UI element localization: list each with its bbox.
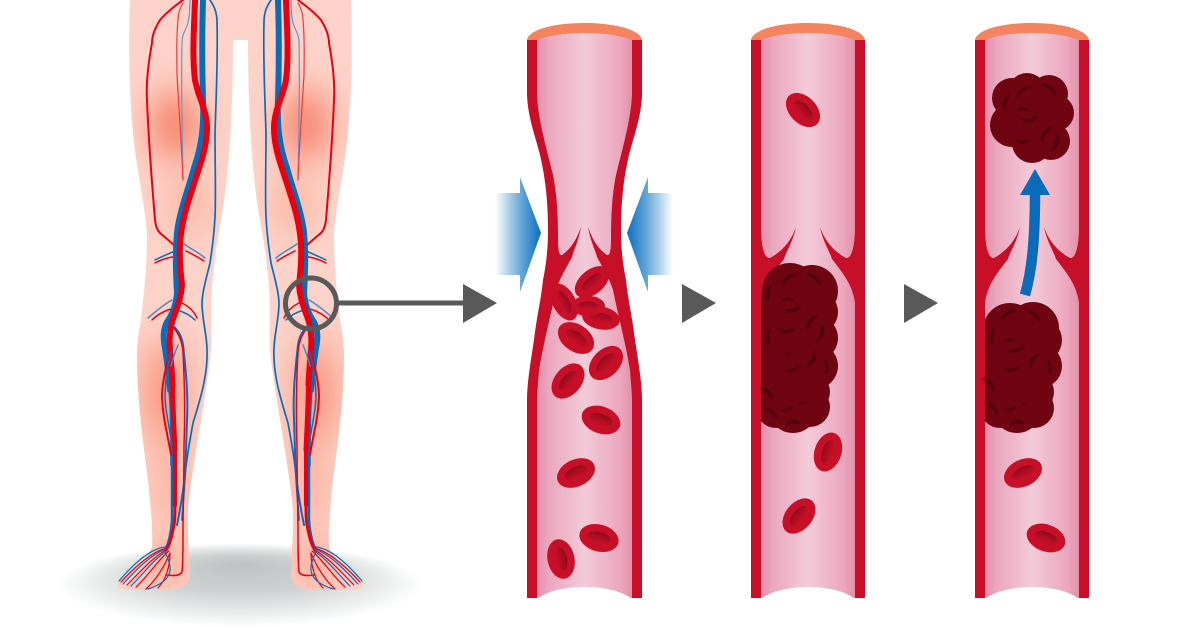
vessel 1: narrowed vein with clumping cells [527, 23, 642, 599]
vessel 2 bottom opening [761, 587, 855, 599]
vessel 1 blood cells [544, 260, 630, 581]
vessel 3 lumen [985, 33, 1079, 598]
vessel 3 upward blue arrow [1020, 169, 1050, 295]
vessel 3 red cells [999, 452, 1069, 558]
vessel 1 wall [527, 40, 642, 598]
vessel 3 detached clot [990, 73, 1074, 163]
arrow from knee to vessel [338, 284, 497, 323]
step arrow 2 [904, 284, 938, 323]
vessel 1 lumen [537, 33, 632, 598]
vessel 2 red cells [776, 86, 847, 540]
vessel 2 top cap [751, 23, 865, 40]
left leg with veins and arteries [118, 0, 241, 590]
right leg with veins and arteries [240, 0, 363, 590]
step arrow 1 [682, 284, 716, 323]
vessel 2: clot forming at valve [751, 23, 865, 599]
vessel 3 top cap [975, 23, 1089, 40]
vessel 1 bottom opening [537, 587, 632, 599]
vessel 1 top cap [527, 23, 642, 40]
vessel 2 wall [751, 40, 865, 598]
vessel 3 bottom opening [985, 587, 1079, 599]
vessel 3 lower clot [980, 302, 1062, 433]
vessel 3: clot breaking loose [975, 23, 1089, 599]
pressure arrow: left [495, 177, 541, 292]
vessel 2 lumen [761, 33, 855, 598]
magnifier circle on knee [286, 278, 336, 329]
vessel 3 wall [975, 40, 1089, 598]
vessel 2 blood clot [756, 263, 838, 433]
ground shadow [58, 543, 422, 627]
pressure arrow: right [627, 177, 673, 292]
